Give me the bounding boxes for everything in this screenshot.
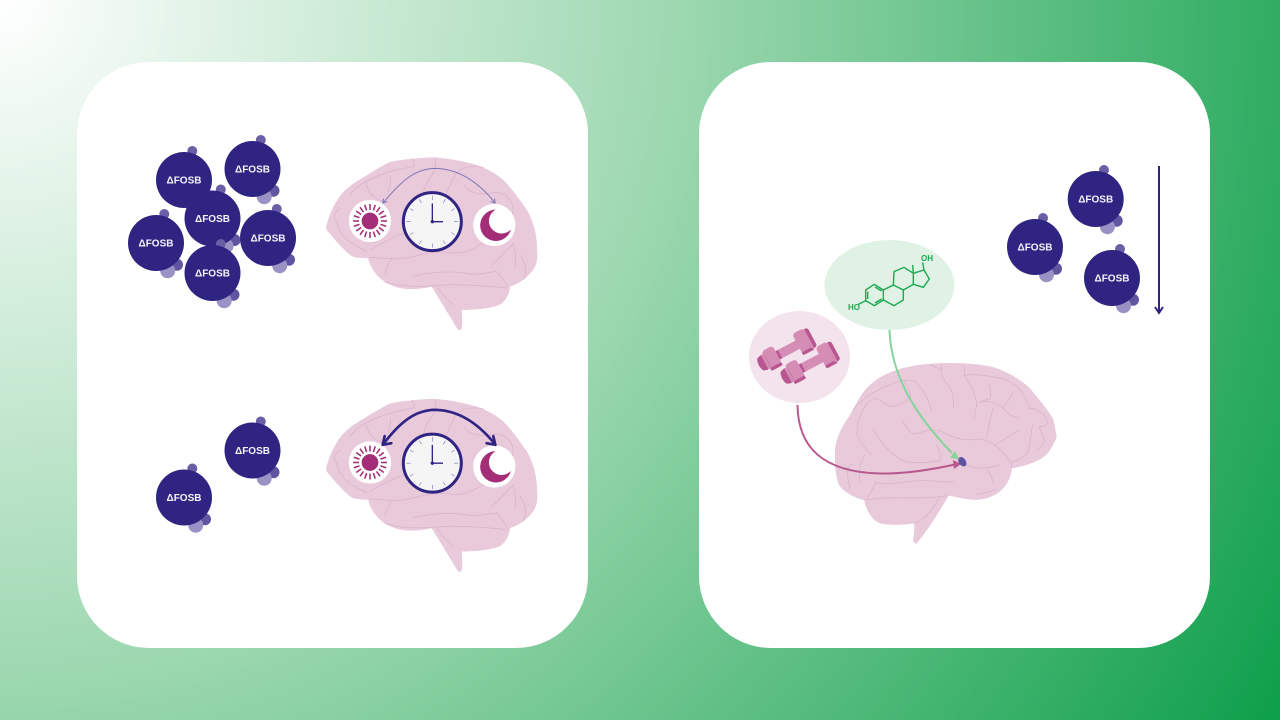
brain: strong circadian rhythm xyxy=(326,399,537,572)
arrow: thin day-night link xyxy=(383,168,495,203)
cluster: many ΔFOSB proteins xyxy=(128,135,296,308)
protein: ΔFOSB right 2: ΔFOSB xyxy=(1018,242,1052,254)
label: OH: OH xyxy=(921,254,933,263)
protein: ΔFOSB right 1 xyxy=(1068,165,1124,234)
protein: ΔFOSB 1: ΔFOSB xyxy=(167,176,201,186)
protein: ΔFOSB 2 xyxy=(224,135,280,204)
protein: ΔFOSB lower 1: ΔFOSB xyxy=(235,446,270,457)
protein: ΔFOSB 3: ΔFOSB xyxy=(195,214,230,225)
group: reduced ΔFOSB proteins xyxy=(1007,165,1140,313)
brain: exercise and estrogen targets xyxy=(835,363,1057,544)
protein: ΔFOSB 5: ΔFOSB xyxy=(251,234,285,244)
brain: weak circadian rhythm xyxy=(326,157,537,330)
label: HO: HO xyxy=(848,303,860,312)
dumbbell 2 xyxy=(777,340,841,389)
protein: ΔFOSB 5 xyxy=(240,204,296,273)
protein: ΔFOSB right 3 xyxy=(1084,244,1140,313)
panel: right card xyxy=(699,62,1210,648)
arrow: bold day-night link xyxy=(383,410,495,445)
protein: ΔFOSB 2: ΔFOSB xyxy=(235,164,270,176)
protein: ΔFOSB 6 xyxy=(184,239,240,308)
arrow: estrogen to brain region xyxy=(890,330,959,459)
protein: ΔFOSB 4 xyxy=(128,209,184,278)
protein: ΔFOSB 6: ΔFOSB xyxy=(195,268,230,280)
protein: ΔFOSB right 2 xyxy=(1007,213,1063,282)
protein: ΔFOSB 3 xyxy=(184,184,240,254)
arrow: decrease xyxy=(1155,166,1163,313)
icon: estradiol molecule in green ellipse xyxy=(824,240,954,330)
icon: dumbbells in pink circle xyxy=(749,311,850,403)
dumbbell 1 xyxy=(753,326,818,376)
protein: ΔFOSB lower 2: ΔFOSB xyxy=(167,493,201,504)
clock with sun and moon xyxy=(349,193,515,251)
protein: ΔFOSB right 3: ΔFOSB xyxy=(1095,274,1129,284)
target: brain nucleus spot xyxy=(956,455,968,468)
panel: left card xyxy=(77,62,588,648)
arrow: exercise to brain region xyxy=(798,405,961,474)
protein: ΔFOSB right 1: ΔFOSB xyxy=(1078,194,1113,206)
protein: ΔFOSB 1 xyxy=(156,146,212,215)
group: few ΔFOSB proteins xyxy=(156,416,280,533)
protein: ΔFOSB 4: ΔFOSB xyxy=(139,238,173,250)
clock with sun and moon xyxy=(349,434,515,492)
